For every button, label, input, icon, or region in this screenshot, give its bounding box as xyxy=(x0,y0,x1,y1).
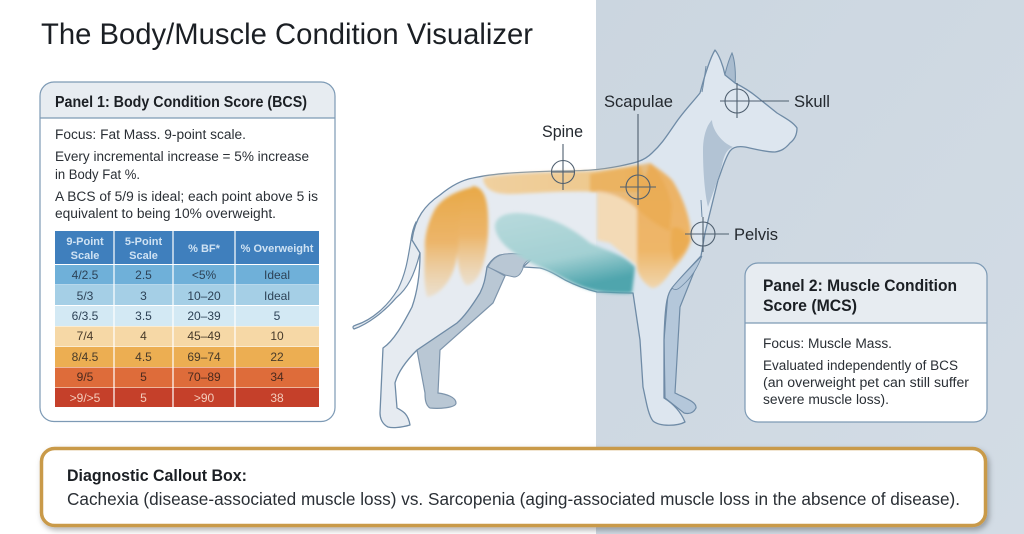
panel 1 header xyxy=(40,82,335,118)
row 9/5: 70–89 xyxy=(187,370,221,384)
crosshair: scapulae xyxy=(620,114,656,205)
label: Skull: Skull xyxy=(794,93,830,111)
panel 1 header: Panel 1: Body Condition Score (BCS) xyxy=(55,94,307,111)
crosshair: spine xyxy=(551,144,575,190)
table header row: 9-Point xyxy=(66,236,104,248)
row 8/4.5 xyxy=(55,347,319,367)
row 5/3 xyxy=(55,285,319,305)
row 7/4: 4 xyxy=(140,329,147,343)
row 5/3: 5/3 xyxy=(77,289,94,303)
row 6/3.5: 3.5 xyxy=(135,309,152,323)
row 6/3.5: 20–39 xyxy=(187,309,221,323)
panel 2 body text: Focus: Muscle Mass. xyxy=(763,336,892,351)
crosshair: skull xyxy=(720,83,789,118)
row >9/>5: >90 xyxy=(194,391,215,405)
panel 1 body text: A BCS of 5/9 is ideal; each point above 5 is xyxy=(55,189,318,204)
groin fold xyxy=(488,254,533,277)
row 4/2.5: 2.5 xyxy=(135,268,152,282)
label: Spine: Spine xyxy=(542,123,583,141)
row 4/2.5 xyxy=(55,265,319,284)
row 4/2.5: 4/2.5 xyxy=(72,268,99,282)
row 9/5: 34 xyxy=(270,370,284,384)
row 5/3: 10–20 xyxy=(187,289,221,303)
chest tendon xyxy=(672,256,702,290)
panel 2 header: Score (MCS) xyxy=(763,297,857,315)
background: shaded right half xyxy=(596,0,1024,534)
row 8/4.5: 8/4.5 xyxy=(72,350,99,364)
far hind leg xyxy=(417,266,505,408)
row 8/4.5: 69–74 xyxy=(187,350,221,364)
row 9/5: 5 xyxy=(140,370,147,384)
fat region: hip xyxy=(424,186,488,297)
row 8/4.5: 22 xyxy=(270,350,284,364)
table header row: % Overweight xyxy=(241,243,314,255)
row >9/>5: 38 xyxy=(270,391,284,405)
ear details xyxy=(701,66,706,217)
fat region: shoulder xyxy=(590,163,691,288)
muscle region: abdomen xyxy=(495,213,635,293)
BCS table xyxy=(55,231,319,407)
fat region: back band xyxy=(483,166,650,194)
callout text: Cachexia (disease-associated muscle loss) vs. Sarcopenia (aging-associated muscle loss in the absence of disease). xyxy=(67,489,960,509)
panel 2 header: Panel 2: Muscle Condition xyxy=(763,277,957,295)
table header row: % BF* xyxy=(188,243,221,255)
panel 1: body condition score xyxy=(40,82,335,422)
diagnostic callout box xyxy=(42,448,986,526)
row 5/3: Ideal xyxy=(264,289,290,303)
neck shadow xyxy=(703,120,733,207)
row 6/3.5 xyxy=(55,306,319,326)
label: Pelvis: Pelvis xyxy=(734,226,778,244)
table header row xyxy=(55,231,319,264)
row 4/2.5: <5% xyxy=(192,268,217,282)
far front leg xyxy=(664,257,700,413)
row 8/4.5: 4.5 xyxy=(135,350,152,364)
row >9/>5: >9/>5 xyxy=(70,391,101,405)
table header row: Scale xyxy=(129,250,158,262)
panel 2 body text: (an overweight pet can still suffer xyxy=(763,375,970,390)
callout heading: Diagnostic Callout Box: xyxy=(67,467,247,485)
panel 2 body text: Evaluated independently of BCS xyxy=(763,358,958,373)
row 7/4: 10 xyxy=(270,329,284,343)
panel 2 body text xyxy=(763,336,970,407)
row 7/4: 7/4 xyxy=(77,329,94,343)
row >9/>5 xyxy=(55,388,319,407)
row 9/5 xyxy=(55,368,319,388)
row 7/4 xyxy=(55,326,319,346)
table header row: Scale xyxy=(71,250,99,262)
panel 1 body text: equivalent to being 10% overweight. xyxy=(55,206,276,221)
panel 1 body text: Every incremental increase = 5% increase xyxy=(55,149,309,164)
illustration: dog anatomy xyxy=(353,50,830,428)
body silhouette xyxy=(380,50,797,428)
row 9/5: 9/5 xyxy=(77,370,94,384)
panel 2 body text: severe muscle loss). xyxy=(763,392,889,407)
tail xyxy=(353,222,428,329)
table header row: 5-Point xyxy=(125,236,162,248)
panel 1 body text: Focus: Fat Mass. 9-point scale. xyxy=(55,127,246,142)
panel 2: muscle condition score xyxy=(745,263,987,422)
row 6/3.5: 6/3.5 xyxy=(72,309,99,323)
row 6/3.5: 5 xyxy=(274,309,281,323)
row >9/>5: 5 xyxy=(140,391,147,405)
far ear xyxy=(725,53,735,84)
title: The Body/Muscle Condition Visualizer xyxy=(41,18,533,51)
label: Scapulae: Scapulae xyxy=(604,93,673,111)
crosshair: pelvis xyxy=(685,217,729,252)
row 7/4: 45–49 xyxy=(187,329,221,343)
row 5/3: 3 xyxy=(140,289,147,303)
panel 2 header xyxy=(745,263,987,323)
row 4/2.5: Ideal xyxy=(264,268,290,282)
panel 1 body text xyxy=(55,127,318,221)
panel 1 body text: in Body Fat %. xyxy=(55,167,140,182)
